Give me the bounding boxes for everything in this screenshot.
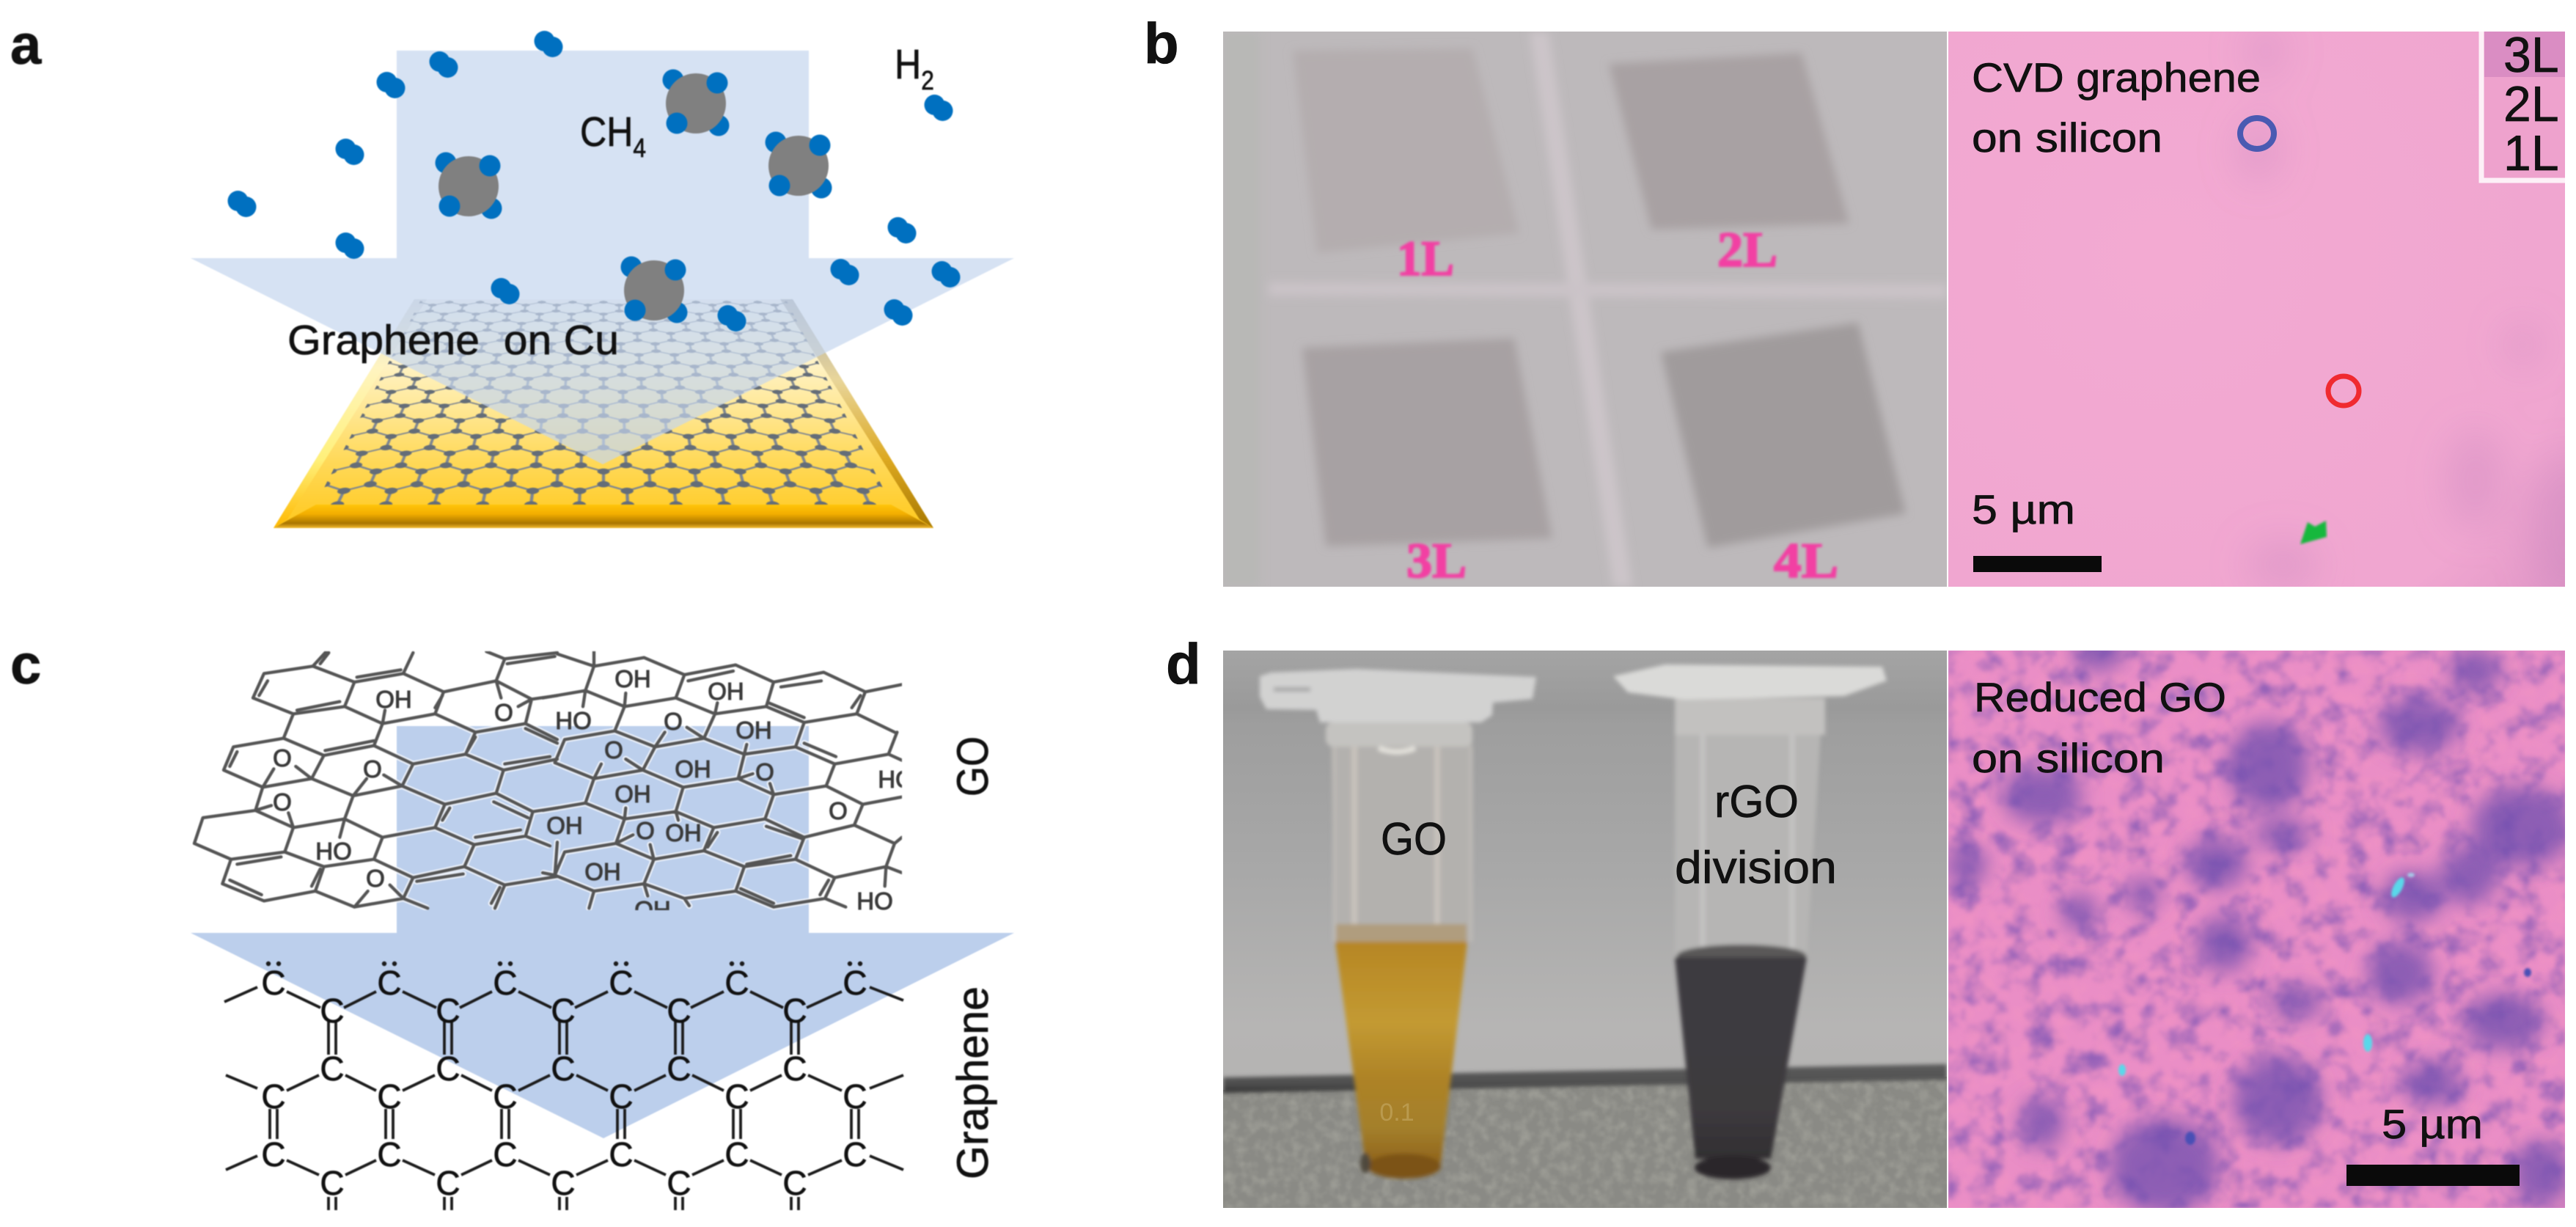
oxygen functional groups: OH: [375, 686, 412, 713]
rotated label: GO: GO: [948, 736, 997, 796]
oxygen functional groups: O: [636, 817, 655, 844]
layer legend: 3L 2L 1L: 3L: [2503, 27, 2559, 83]
squares labels: [1397, 221, 1838, 588]
arrow: blue downward arrow: [191, 726, 1014, 1138]
graphene chemical structure: CCCCCC: [261, 964, 867, 1002]
graphene chemical structure: CCCCC: [320, 992, 807, 1030]
oxygen functional groups: O: [273, 788, 292, 816]
scale bar 5 µm: [2346, 1101, 2520, 1186]
oxygen functional groups: HO: [555, 707, 592, 734]
oxygen functional groups: HO: [878, 766, 914, 793]
graphene chemical structure: CCCCCC: [261, 1135, 867, 1173]
photo: two centrifuge tubes: [1223, 651, 1947, 1208]
graphene chemical structure: CCCCCC: [261, 1077, 867, 1116]
methane molecules: [436, 69, 832, 323]
scale bar 5 µm: 5 µm: [1972, 486, 2075, 532]
oxygen functional groups: O: [273, 744, 292, 772]
squares labels: 1L: [1397, 230, 1454, 286]
label: CH4: CH: [580, 109, 633, 155]
panel c: GO reduced to graphene schematic: [10, 638, 1013, 1211]
specks: cyan particles: [2118, 873, 2531, 1145]
squares labels: 4L: [1774, 532, 1838, 588]
graphene chemical structure: CCCCC: [320, 1164, 807, 1202]
label: rGO division: rGO: [1714, 777, 1799, 827]
label: Graphene on Cu: Graphene on Cu: [287, 317, 619, 364]
oxygen functional groups: OH: [735, 717, 772, 744]
photo: optical micrograph of reduced GO: [1946, 634, 2574, 1214]
label: Reduced GO on silicon: Reduced GO: [1974, 674, 2226, 720]
oxygen functional groups: OH: [708, 678, 744, 705]
oxygen functional groups: HO: [315, 838, 352, 865]
label: CVD graphene on silicon: on silicon: [1972, 114, 2162, 161]
scale bar 5 µm: 5 µm: [2382, 1101, 2483, 1147]
panel letter a: a: [10, 14, 42, 76]
scale bar 5 µm: [1973, 495, 2102, 572]
label: H2: 2: [921, 66, 934, 95]
shelf edge: [1223, 1064, 1947, 1093]
label: rGO division: division: [1675, 843, 1837, 893]
label: CH4: 4: [633, 133, 646, 163]
graphene chemical structure: [224, 962, 903, 1210]
oxygen functional groups: OH: [546, 812, 583, 839]
oxygen functional groups: OH: [614, 665, 651, 692]
label: Reduced GO on silicon: [1972, 674, 2226, 781]
panel b: photographs of CVD graphene on silicon: [1144, 15, 2565, 587]
photo: patterned graphene squares 1L to 4L: [1223, 32, 1947, 588]
oxygen functional groups: O: [494, 699, 513, 726]
oxygen functional groups: O: [664, 708, 683, 735]
graphene chemical structure: CCCCC: [320, 1050, 807, 1088]
photo: optical micrograph of CVD graphene: [1948, 22, 2576, 601]
oxygen functional groups: HO: [856, 887, 893, 915]
oxygen functional groups: [273, 665, 914, 923]
tube: rGO dispersion: [1613, 664, 1887, 1179]
tube volume mark: 0.1: [1379, 1099, 1414, 1127]
marker: red ring: [2328, 376, 2359, 406]
label: CVD graphene on silicon: CVD graphene: [1972, 54, 2261, 100]
layer legend: 3L 2L 1L: 1L: [2503, 125, 2559, 181]
GO chemical structure: [194, 651, 914, 923]
squares labels: 2L: [1717, 221, 1777, 277]
hydrogen molecules: [227, 31, 961, 332]
oxygen functional groups: O: [829, 797, 848, 824]
oxygen functional groups: O: [366, 865, 385, 892]
rotated label: Graphene: Graphene: [948, 986, 997, 1179]
marker: blue ring: [2240, 118, 2274, 149]
graphene honeycomb lattice in perspective: [324, 301, 883, 505]
marker: green arrow: [2300, 521, 2327, 544]
squares labels: 3L: [1406, 532, 1467, 588]
arrow: light blue downward arrow: [191, 51, 1014, 464]
oxygen functional groups: O: [755, 758, 774, 785]
panel a: CVD growth of graphene on copper: [10, 14, 1013, 529]
oxygen functional groups: OH: [614, 780, 651, 807]
oxygen functional groups: OH: [634, 896, 671, 923]
copper substrate: [273, 299, 934, 529]
label: rGO division: [1675, 777, 1837, 893]
label: Reduced GO on silicon: on silicon: [1972, 735, 2165, 781]
label: GO: GO: [1381, 814, 1447, 865]
oxygen functional groups: O: [363, 755, 382, 783]
oxygen functional groups: O: [604, 736, 623, 763]
layer legend: 3L 2L 1L: 2L: [2503, 76, 2559, 132]
oxygen functional groups: OH: [584, 858, 621, 885]
oxygen functional groups: OH: [675, 755, 711, 783]
oxygen functional groups: OH: [665, 819, 702, 846]
process arrow, molecules and labels: [10, 14, 1013, 465]
label: CVD graphene on silicon: [1973, 62, 2259, 153]
layer legend: 3L 2L 1L: [2481, 27, 2565, 181]
tube: GO dispersion: [1260, 669, 1536, 1179]
label: H2: H: [895, 41, 921, 88]
panel d: photographs of GO and rGO dispersions and rGO micrograph: [1166, 638, 2565, 1208]
